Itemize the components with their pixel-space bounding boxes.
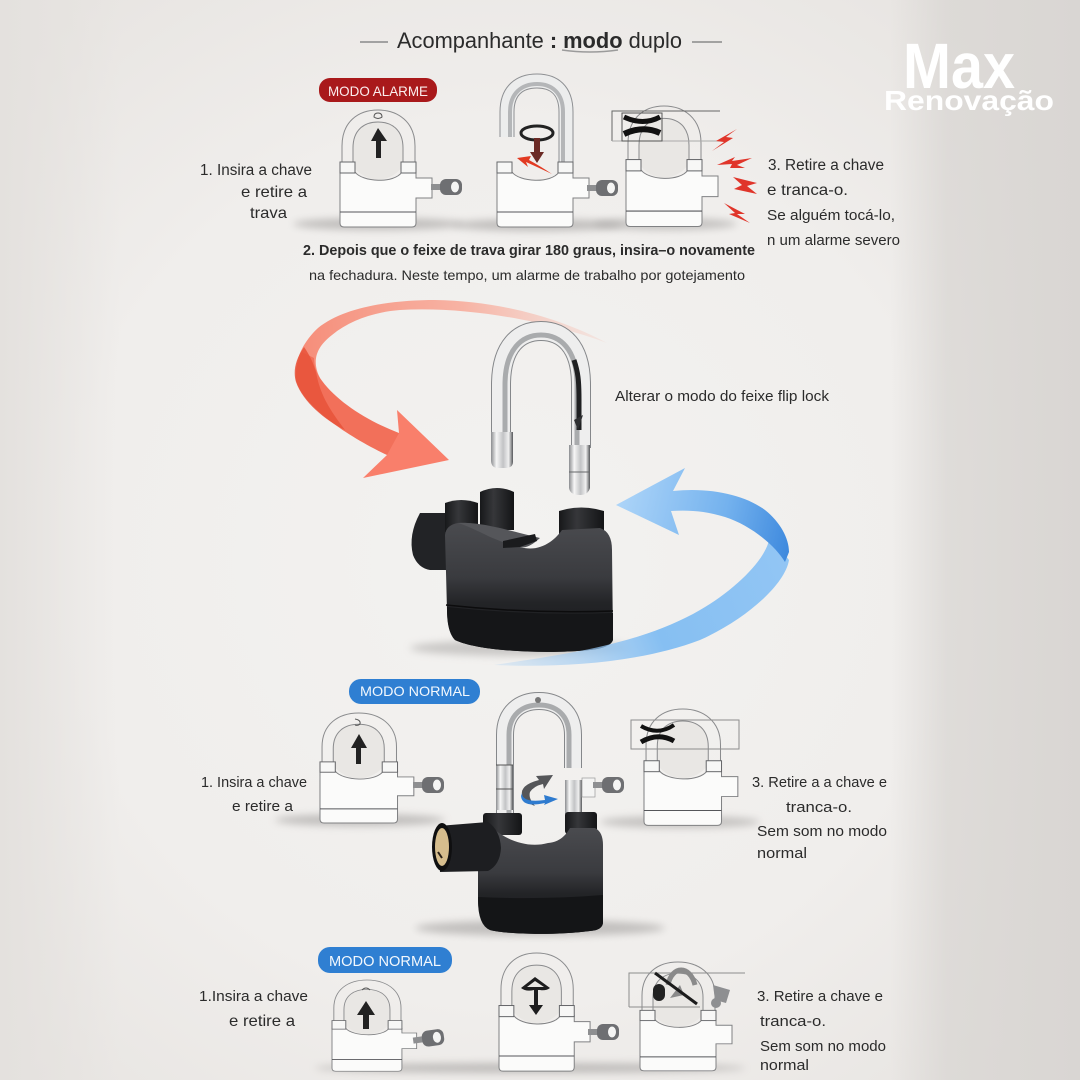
step 3 text: 3. Retire a a chave e <box>752 775 887 791</box>
title: Acompanhante : modo duplo <box>397 28 682 53</box>
panel: normal mode one <box>201 679 887 936</box>
icon: lock step 2 <box>452 81 622 231</box>
icon: chrome shackle <box>491 331 590 495</box>
step 3 text: 3. Retire a chave e <box>757 989 883 1005</box>
step 3 text <box>752 775 887 862</box>
badge: modo normal <box>349 679 480 704</box>
logo: Renovação <box>884 85 1054 116</box>
step 3 text: Sem som no modo <box>757 824 887 840</box>
step 1 text <box>201 775 307 815</box>
step 1 text <box>199 988 308 1030</box>
icon: lock step 1 <box>315 980 745 1073</box>
badge: modo alarme <box>319 78 437 102</box>
step 3 text: tranca-o. <box>760 1013 826 1030</box>
icon: lock step 1 <box>293 110 463 230</box>
step 3 text: normal <box>757 846 807 862</box>
arrow: blue curved <box>494 468 789 666</box>
flip label: Alterar o modo do feixe flip lock <box>615 389 830 405</box>
icon: alarm sound bolts <box>712 129 757 223</box>
step 3 text: tranca-o. <box>786 799 852 816</box>
arrow: red curved <box>295 300 607 478</box>
step 1 text <box>200 162 312 222</box>
step 2 text <box>303 242 755 283</box>
logo: Max <box>903 30 1015 102</box>
step 3 text: normal <box>760 1058 809 1074</box>
step 1 text: trava <box>250 205 287 222</box>
step 3 text <box>767 157 900 249</box>
step 1 text: 1. Insira a chave <box>201 775 307 791</box>
badge: modo normal <box>318 947 452 973</box>
badge: modo normal: MODO NORMAL <box>360 683 470 699</box>
panel: normal mode two <box>199 947 886 1074</box>
icon: black lock body <box>410 488 630 656</box>
step 1 text: e retire a <box>232 798 294 815</box>
step 2 text: 2. Depois que o feixe de trava girar 180 graus, insira–o novamente <box>303 242 755 259</box>
step 3 text: Sem som no modo <box>760 1039 886 1055</box>
icon: lock step 3 <box>593 106 737 230</box>
step 3 text: n um alarme severo <box>767 232 900 249</box>
step 2 text: na fechadura. Neste tempo, um alarme de trabalho por gotejamento <box>309 267 745 283</box>
badge: modo normal: MODO NORMAL <box>329 954 441 970</box>
step 1 text: e retire a <box>229 1013 295 1030</box>
icon: lock step 1 <box>275 713 445 826</box>
panel: alarm mode <box>200 78 900 283</box>
step 1 text: 1.Insira a chave <box>199 988 308 1005</box>
step 3 text: 3. Retire a chave <box>768 157 884 174</box>
step 3 text <box>757 989 886 1074</box>
icon: lock step 3 <box>600 709 760 828</box>
icon: lock step 2 <box>499 953 619 1071</box>
badge: modo alarme: MODO ALARME <box>328 83 428 99</box>
icon: lock step 3 silent <box>629 962 745 1071</box>
step 3 text: e tranca-o. <box>767 182 848 199</box>
logo <box>884 30 1054 116</box>
icon: central lock with shackle <box>415 697 665 936</box>
panel: flip shackle illustration <box>295 300 830 666</box>
step 1 text: 1. Insira a chave <box>200 162 312 179</box>
step 3 text: Se alguém tocá-lo, <box>767 207 895 224</box>
step 1 text: e retire a <box>241 184 307 201</box>
